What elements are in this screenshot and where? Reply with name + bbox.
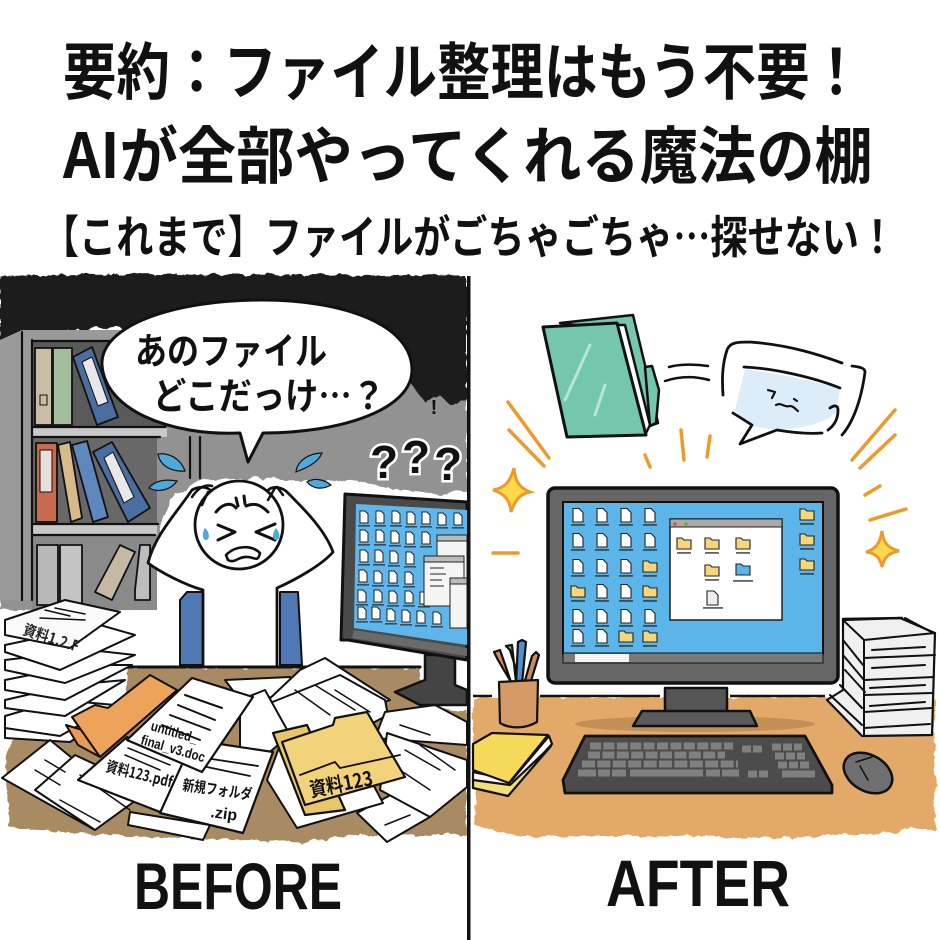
document: untitled_final_v3.doc: final_v3.doc	[139, 732, 207, 765]
pen cup	[494, 640, 539, 727]
desk shadow	[575, 716, 815, 732]
speech bubble	[102, 300, 412, 462]
overlapping windows	[424, 535, 467, 628]
binders: top shelf	[35, 347, 150, 605]
sparkle	[866, 531, 899, 567]
speech bubble: あのファイル	[135, 321, 327, 375]
label: AFTER: AFTER	[606, 846, 790, 920]
question marks: ?	[402, 431, 430, 483]
label: BEFORE: BEFORE	[134, 849, 342, 923]
scattered papers	[2, 658, 467, 842]
title	[62, 22, 873, 196]
yellow folder 資料123: 資料123	[307, 762, 375, 803]
person	[148, 481, 333, 667]
question marks: !	[431, 397, 437, 419]
face	[216, 496, 275, 540]
motion lines	[665, 365, 709, 381]
yellow folder 資料123	[273, 712, 405, 815]
question marks: ?	[370, 436, 398, 488]
keyboard	[563, 736, 832, 793]
panel: before	[0, 274, 467, 923]
chair	[180, 592, 302, 665]
document: 資料123.pdf: 資料123.pdf	[104, 755, 176, 793]
desktop icons	[356, 511, 464, 628]
chat bubble character	[722, 342, 865, 444]
monitor right	[548, 488, 838, 726]
desk	[5, 668, 467, 842]
paper stack left	[5, 600, 135, 742]
panel: after	[473, 315, 935, 920]
document: untitled_final_v3.doc	[127, 678, 253, 772]
speech bubble: どこだっけ…？	[153, 366, 385, 420]
notebook	[473, 733, 552, 796]
document: 新規フォルダ.zip	[160, 740, 273, 833]
dark ceiling band	[0, 274, 467, 405]
wall shade	[0, 340, 467, 610]
organised window	[670, 519, 782, 620]
bookshelf	[0, 330, 200, 610]
sparkle	[493, 468, 530, 512]
desktop icons	[571, 508, 814, 647]
divider	[467, 276, 470, 940]
orange rays	[493, 402, 906, 553]
document: untitled_final_v3.doc: untitled_	[149, 718, 200, 746]
orange folder	[66, 675, 177, 757]
paper stack left: 資料1.2.F	[20, 619, 82, 657]
question marks: ?	[434, 438, 462, 490]
mouse	[836, 744, 900, 802]
paper stack right	[827, 618, 935, 736]
title: AIが全部やってくれる魔法の棚	[62, 106, 873, 196]
question marks	[370, 397, 462, 490]
sweat drops	[149, 453, 331, 490]
document: 資料123.pdf	[78, 737, 200, 812]
monitor left	[341, 494, 467, 705]
desk	[473, 697, 935, 838]
teal folder	[543, 315, 659, 437]
document: 新規フォルダ.zip: 新規フォルダ	[181, 774, 254, 805]
document: 新規フォルダ.zip: .zip	[209, 804, 238, 825]
